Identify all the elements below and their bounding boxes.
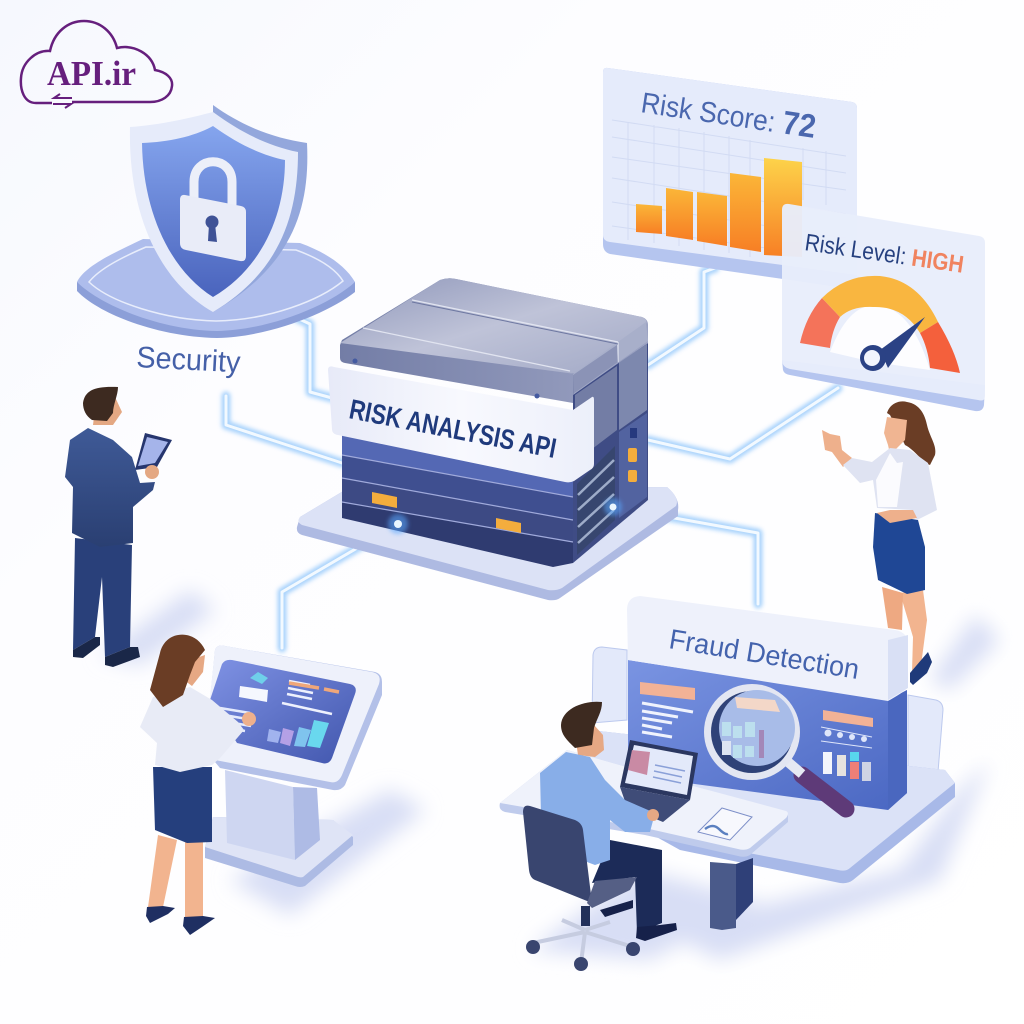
hand: [242, 712, 256, 726]
shoes: [73, 637, 140, 667]
platform: [77, 239, 355, 338]
shirt: [540, 752, 655, 865]
face: [93, 395, 122, 425]
rack side: [573, 343, 648, 563]
icon: shield: [130, 105, 307, 312]
person: man with tablet: [65, 387, 172, 667]
chair: [523, 806, 640, 971]
skirt: [873, 513, 925, 594]
legs: [148, 835, 203, 917]
shoe: [910, 652, 932, 685]
legs: [900, 590, 927, 673]
rack front: [342, 430, 573, 567]
shoes: [600, 900, 677, 941]
hair: [887, 401, 935, 465]
hair: [561, 702, 602, 748]
jacket: [843, 448, 937, 520]
hand: [145, 465, 159, 479]
server base: [297, 487, 678, 600]
skirt: [153, 767, 212, 843]
hand: [647, 809, 659, 821]
heading: fraud detection: Fraud Detection: [667, 623, 862, 685]
panel: risk level gauge: [782, 204, 985, 411]
desk top: [500, 750, 788, 857]
shirt: [876, 453, 903, 507]
fraud header: [627, 596, 908, 701]
pointing hand: [822, 430, 852, 467]
legs: [73, 538, 132, 657]
shoes: [146, 906, 215, 935]
kiosk: touch screen: [205, 646, 382, 887]
heading: risk level: Risk Level: HIGH: [803, 229, 965, 279]
back panel: [592, 647, 627, 723]
pedestal: [225, 770, 295, 860]
laptop: [620, 740, 698, 822]
face: [575, 725, 604, 757]
tablet: [135, 433, 172, 470]
waist hand: [877, 510, 917, 523]
magnifying glass: [704, 684, 846, 809]
face: [184, 655, 205, 686]
kiosk base: [205, 817, 353, 887]
jacket: [65, 428, 155, 547]
fraud dashboard: [628, 660, 907, 810]
icon: padlock: [180, 162, 246, 261]
connector lines: [226, 268, 838, 648]
logo: API.ir: API.ir: [47, 54, 136, 93]
banner: [328, 366, 594, 482]
rack top: [340, 278, 648, 403]
trousers: [592, 840, 662, 933]
hair: [150, 635, 205, 707]
notepad: [698, 808, 752, 840]
chart grid: [612, 120, 846, 257]
logo: API.ir: [21, 21, 172, 108]
glowing ports: [388, 498, 622, 534]
server: risk analysis api: [297, 278, 678, 600]
face: [884, 417, 907, 463]
floor shadows: [100, 590, 1000, 960]
person: woman at kiosk: [140, 635, 256, 935]
heading: risk analysis api: RISK ANALYSIS API: [347, 393, 559, 464]
bar chart: [636, 158, 802, 257]
panel: risk score chart: [603, 68, 857, 290]
hair: [83, 387, 118, 421]
heading: risk score: Risk Score: 72: [639, 82, 819, 145]
person: woman pointing: [822, 401, 937, 685]
desk: fraud detection: [500, 596, 955, 971]
desk legs: [710, 862, 736, 930]
label: Security: Security: [136, 341, 241, 379]
person: seated man: [540, 702, 677, 941]
screen: [210, 660, 356, 763]
leds: [372, 492, 397, 508]
gauge chart: [800, 276, 960, 373]
blouse: [140, 687, 244, 772]
desk platform: [590, 730, 955, 883]
kiosk top: [205, 646, 382, 790]
panel: security shield on platform: [77, 105, 355, 338]
